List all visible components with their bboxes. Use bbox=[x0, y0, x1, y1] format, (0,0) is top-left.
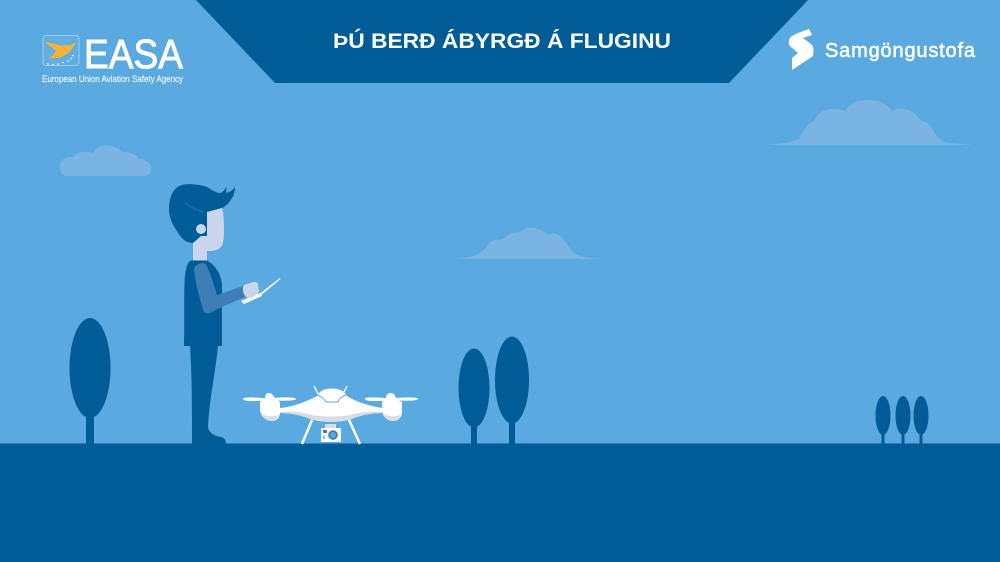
ear bbox=[196, 224, 206, 234]
EASA wordmark: EASA bbox=[84, 31, 184, 77]
title banner bbox=[196, 0, 808, 83]
left motor pod bbox=[260, 393, 280, 421]
left propeller bbox=[243, 397, 296, 401]
tree: left bbox=[70, 318, 110, 445]
tree: centre small bbox=[458, 348, 490, 445]
torso bbox=[184, 260, 222, 346]
pod shading bbox=[262, 414, 401, 421]
Samgöngustofa logo bbox=[789, 29, 976, 70]
title text: ÞÚ BERÐ ÁBYRGÐ Á FLUGINU bbox=[333, 29, 671, 53]
cloud: middle bbox=[456, 228, 600, 259]
hair bbox=[169, 184, 235, 243]
hair highlight bbox=[185, 203, 203, 212]
EASA tagline: European Union Aviation Safety Agency bbox=[42, 74, 184, 84]
legs bbox=[190, 345, 226, 444]
ground bbox=[0, 444, 1000, 562]
drone bbox=[243, 386, 418, 444]
landing legs bbox=[302, 420, 360, 444]
cloud: top right bbox=[764, 100, 972, 145]
hand bbox=[243, 282, 259, 298]
camera bbox=[321, 424, 341, 442]
right motor pod bbox=[382, 393, 402, 421]
person with controller bbox=[169, 184, 280, 444]
controller bbox=[241, 278, 280, 304]
body shading bbox=[280, 412, 382, 422]
canopy line bbox=[315, 394, 348, 402]
icon: EASA bird bbox=[43, 36, 79, 66]
neck and face bbox=[193, 208, 224, 262]
antennas bbox=[314, 386, 347, 394]
EASA logo bbox=[42, 31, 184, 84]
icon: S mark bbox=[789, 29, 814, 70]
wordmark: Samgöngustofa bbox=[825, 40, 976, 62]
arm bbox=[194, 263, 245, 313]
drone body bbox=[280, 388, 382, 422]
right propeller bbox=[365, 397, 418, 401]
trees: right group bbox=[876, 396, 928, 445]
cloud: left bbox=[60, 145, 151, 176]
tree: centre large bbox=[495, 336, 529, 445]
